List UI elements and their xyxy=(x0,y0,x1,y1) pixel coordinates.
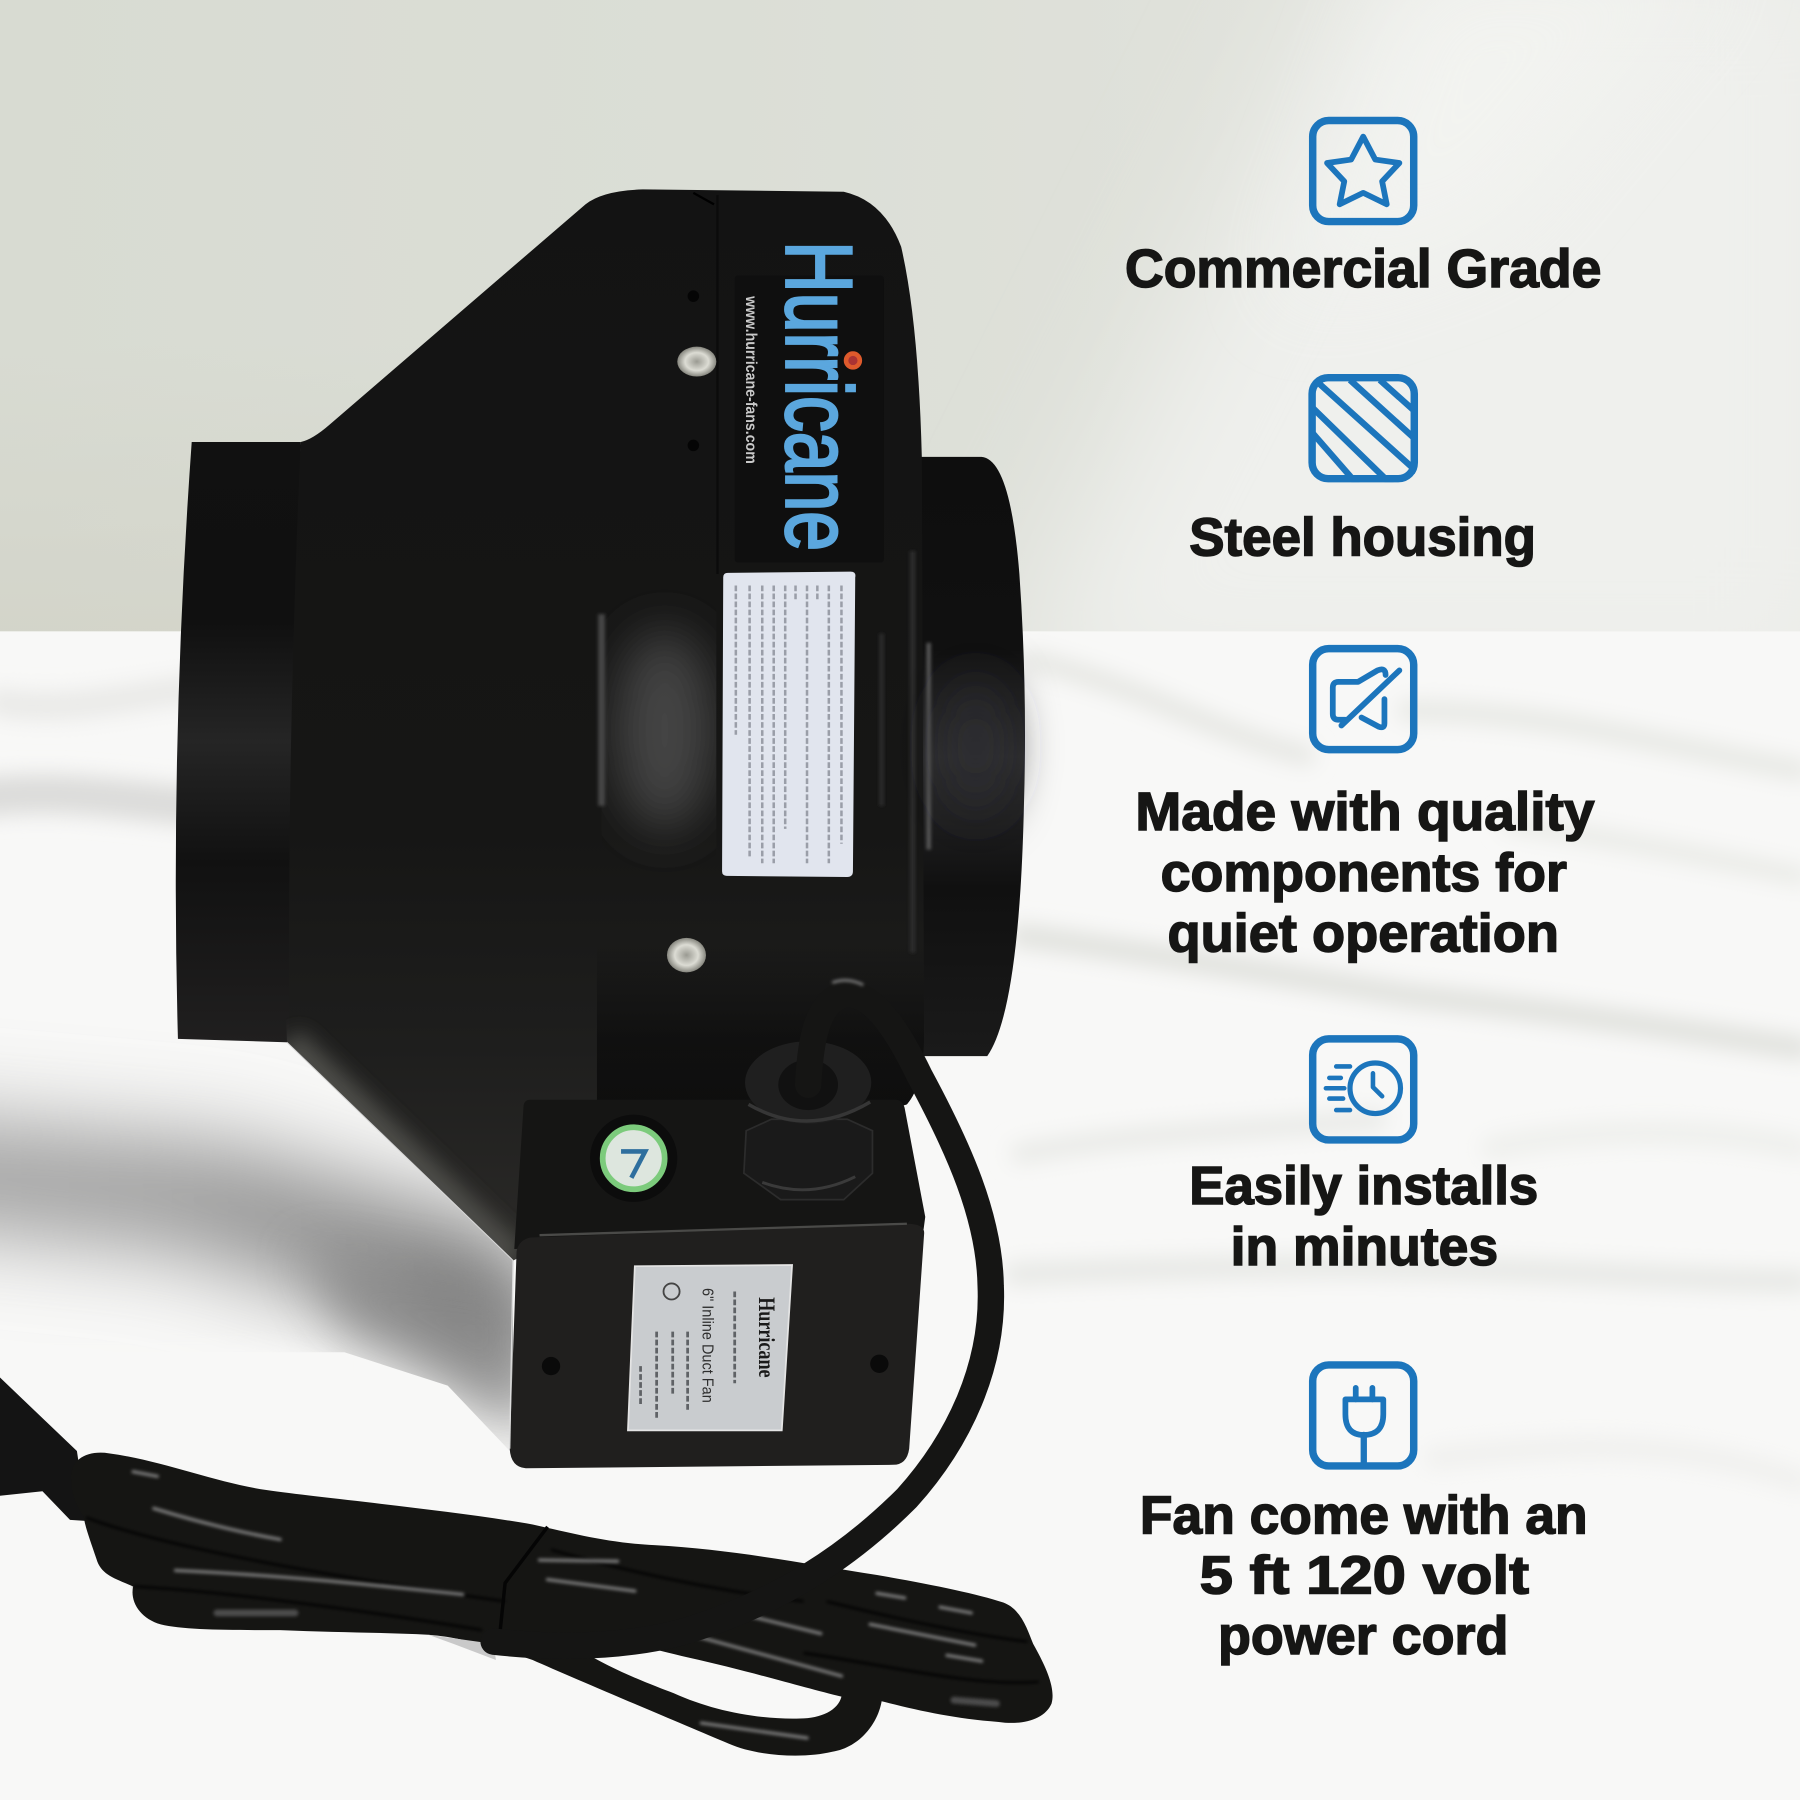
logo sticker panel xyxy=(735,276,884,562)
website url: www.hurricane-fans.com xyxy=(742,295,760,464)
cord strand separations xyxy=(86,1518,1039,1683)
silver cord tag xyxy=(428,1635,496,1660)
box screws xyxy=(542,1355,889,1375)
cable gland xyxy=(744,1041,872,1200)
text: quality components: components for xyxy=(1161,843,1567,903)
icon: plug xyxy=(1313,1365,1414,1466)
housing shading xyxy=(287,551,930,1260)
text: cord description xyxy=(1140,1486,1588,1666)
feature: quiet operation xyxy=(1135,649,1595,964)
power cord xyxy=(0,980,1053,1756)
junction box top face xyxy=(514,1100,925,1249)
text: quality components: quiet operation xyxy=(1167,904,1559,964)
icon: steel stripes xyxy=(1306,378,1423,488)
junction box xyxy=(510,1041,925,1468)
text: quality components xyxy=(1135,782,1595,964)
rating label xyxy=(628,1265,792,1430)
feature: steel housing xyxy=(1189,378,1536,568)
rating label: Hurricane xyxy=(754,1297,779,1378)
screws and holes xyxy=(667,290,716,972)
feature list xyxy=(1125,121,1601,1666)
left inlet tube xyxy=(176,442,301,1042)
feature: easy install xyxy=(1189,1039,1538,1277)
rating label: 6" Inline Duct Fan xyxy=(699,1288,717,1403)
text: cord description: power cord xyxy=(1218,1606,1508,1666)
icon: muted speaker xyxy=(1313,649,1414,750)
heading: Steel housing: Steel housing xyxy=(1189,508,1536,568)
icon: star xyxy=(1313,121,1414,222)
inline duct fan product xyxy=(176,189,1025,1468)
fan main housing xyxy=(283,189,924,1260)
coiled cord bundle xyxy=(71,1453,1053,1756)
feature: commercial grade xyxy=(1125,121,1601,299)
text: easily installs xyxy=(1189,1156,1538,1277)
cord highlights xyxy=(133,1472,996,1738)
heading: Commercial Grade: Commercial Grade xyxy=(1125,239,1601,299)
junction box front face xyxy=(510,1224,924,1468)
icon: fast clock xyxy=(1313,1039,1414,1140)
text: easily installs: in minutes xyxy=(1231,1217,1498,1277)
Hurricane logo: Hurricane xyxy=(766,241,871,551)
cast shadow under fan xyxy=(0,1119,528,1435)
plug at left edge xyxy=(0,1378,87,1521)
cable from junction box xyxy=(494,994,991,1646)
text: cord description: Fan come with an xyxy=(1140,1486,1588,1546)
warning label xyxy=(722,572,855,877)
right outlet tube xyxy=(913,457,1025,1056)
feature: power cord xyxy=(1140,1365,1588,1666)
text: easily installs: Easily installs xyxy=(1189,1156,1538,1216)
text: quality components: Made with quality xyxy=(1135,782,1595,842)
icon: orange swirl mark xyxy=(846,354,860,367)
cable tie xyxy=(498,1527,548,1650)
text: cord description: 5 ft 120 volt xyxy=(1200,1545,1529,1605)
indicator light xyxy=(590,1115,677,1202)
